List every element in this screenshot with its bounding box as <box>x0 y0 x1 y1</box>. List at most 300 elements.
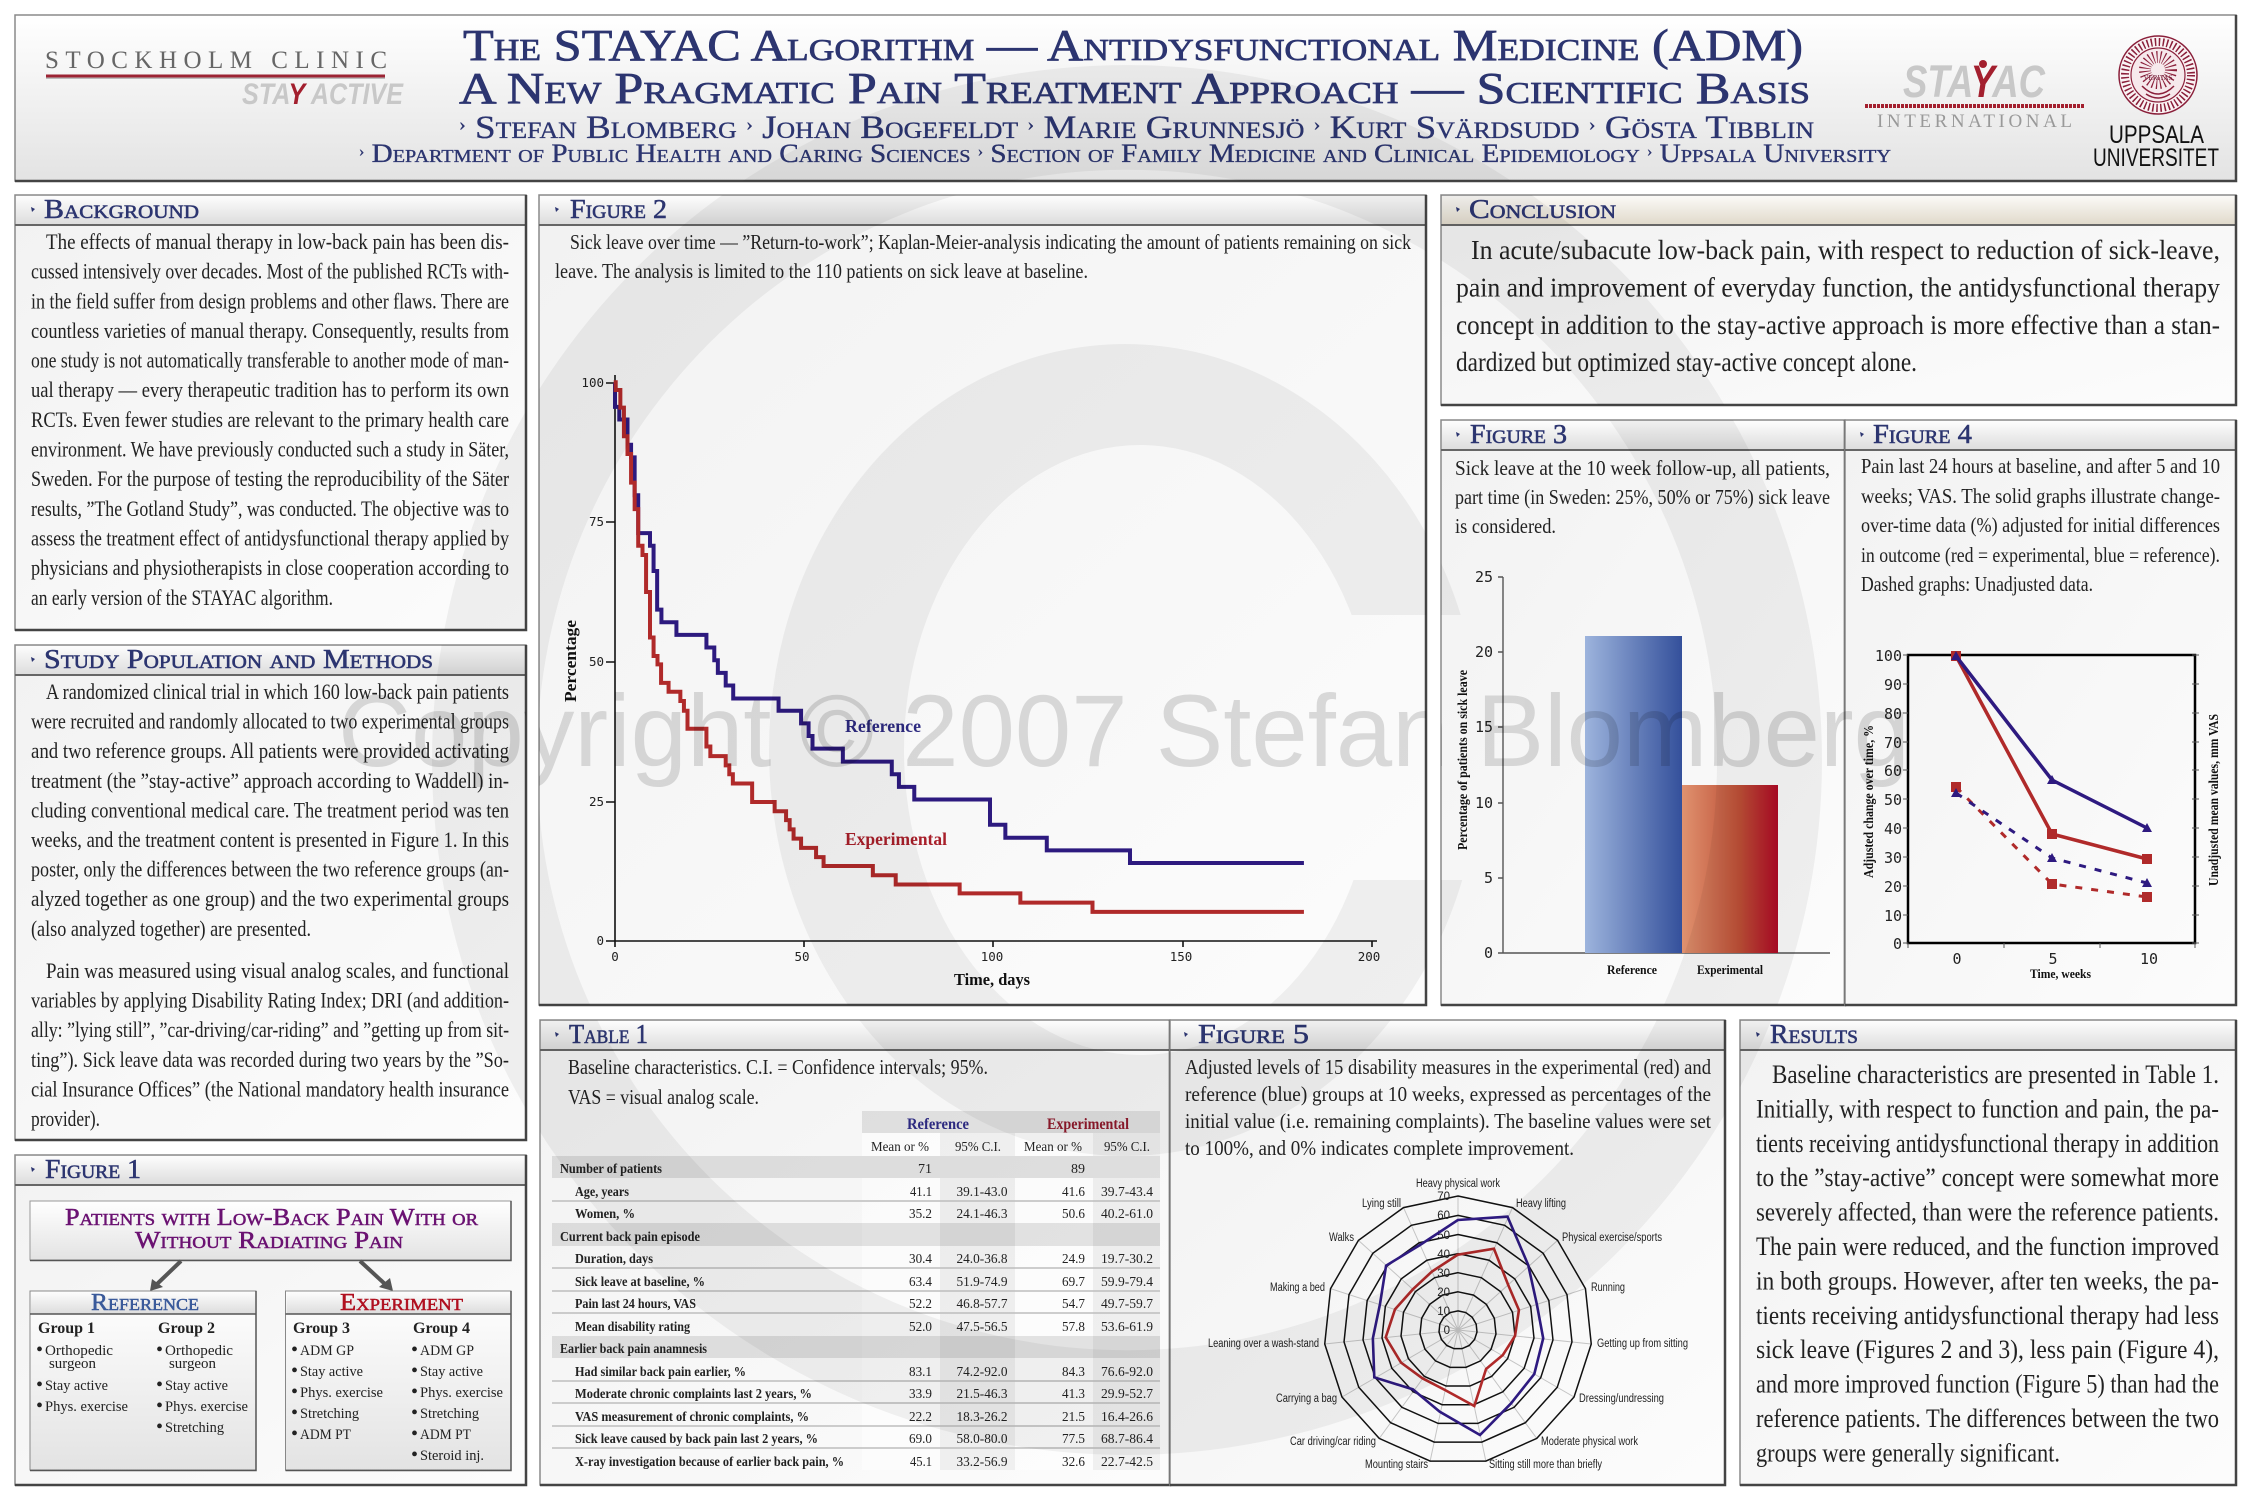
panel: figure 3 <box>1441 419 1845 1005</box>
axis labels: Physical exercise/sports <box>1562 1232 1662 1244</box>
row: x-ray investigation: 22.7-42.5 <box>1101 1455 1153 1470</box>
row: VAS measurement: 22.2 <box>909 1410 932 1425</box>
column headers <box>871 1116 1150 1155</box>
row: moderate chronic complaints: 29.9-52.7 <box>1101 1387 1153 1402</box>
group 3: • <box>291 1381 298 1403</box>
x tick labels <box>1952 950 2158 968</box>
group 4: ADM PT <box>420 1427 471 1443</box>
title line 2: A New Pragmatic Pain Treatment Approach — Scientific Basis <box>459 64 1810 113</box>
y tick labels: 20 <box>1884 878 1902 896</box>
curve: experimental <box>616 380 1304 912</box>
axes <box>606 375 1377 947</box>
affiliations: › Department of Public Health and Caring Sciences › Section of Family Medicine and Clinical Epidemiology › Uppsala University <box>359 139 1891 168</box>
text block: background: assess the treatment effect of antidysfunctional therapy applied by <box>31 526 509 550</box>
row: age <box>575 1185 1153 1200</box>
watermark: copyright symbol and text: Copyright © 2007 Stefan Blomberg <box>338 674 1910 788</box>
row: sick leave caused by back pain: 77.5 <box>1062 1432 1085 1447</box>
flow box: reference <box>30 1290 256 1470</box>
text block: study paragraph 1: cluding conventional medical care. The treatment period was ten <box>31 797 509 822</box>
row: sick leave at baseline: 63.4 <box>909 1275 932 1290</box>
logo: Uppsala University seal <box>2093 36 2219 172</box>
row: number of patients <box>560 1162 1085 1177</box>
group 1 <box>36 1320 128 1417</box>
row: earlier back pain anamnesis: Earlier back pain anamnesis <box>560 1342 707 1357</box>
column headers: Reference <box>907 1116 969 1133</box>
caption: figure 3 <box>1455 456 1830 538</box>
group 4: Phys. exercise <box>420 1385 503 1401</box>
logo: Uppsala University seal: UPPSALA <box>2109 121 2204 149</box>
row: women: Women, % <box>575 1207 635 1222</box>
row: age: Age, years <box>575 1185 629 1200</box>
group 4: • <box>411 1360 418 1382</box>
heading: figure 1: Figure 1 <box>45 1154 141 1184</box>
caption: table 1: Baseline characteristics. C.I. = Confidence intervals; 95%. <box>568 1055 988 1079</box>
group 1: Phys. exercise <box>45 1399 128 1415</box>
y tick labels: 90 <box>1884 676 1902 694</box>
caption: table 1 <box>568 1055 988 1109</box>
group 3: • <box>291 1360 298 1382</box>
ring value labels: 40 <box>1437 1249 1450 1261</box>
axis tick labels: 25 <box>589 794 604 809</box>
group 2: • <box>156 1374 163 1396</box>
axis tick labels: 0 <box>596 933 604 948</box>
group 3: ADM GP <box>300 1343 354 1359</box>
row: moderate chronic complaints: 33.9 <box>909 1387 932 1402</box>
row: x-ray investigation: 33.2-56.9 <box>956 1455 1008 1470</box>
text block: background: countless varieties of manual therapy. Consequently, results from <box>31 318 509 343</box>
axis labels: Sitting still more than briefly <box>1489 1459 1602 1471</box>
group 4: ADM GP <box>420 1343 474 1359</box>
row: sick leave at baseline: 69.7 <box>1062 1275 1085 1290</box>
y tick labels: 10 <box>1475 794 1493 812</box>
text block: study paragraph 2: cial Insurance Offices” (the National mandatory health insurance <box>31 1076 509 1101</box>
row: VAS measurement: 18.3-26.2 <box>956 1410 1008 1425</box>
row: pain last 24 hours: 54.7 <box>1062 1297 1085 1312</box>
panel: figure 2 <box>539 194 1426 1005</box>
row: women: 35.2 <box>909 1207 932 1222</box>
text block: study paragraph 2: provider). <box>31 1106 100 1131</box>
text block: background: Sweden. For the purpose of testing the reproducibility of the Säter <box>31 466 510 491</box>
flow box: patients: Patients with Low-Back Pain With or <box>65 1205 479 1231</box>
panel: conclusion <box>1441 194 2236 405</box>
series: reference <box>1373 1217 1543 1435</box>
caption: figure 5: initial value (i.e. remaining complaints). The baseline values were set <box>1185 1109 1711 1133</box>
caption: figure 5: to 100%, and 0% indicates complete improvement. <box>1185 1136 1574 1160</box>
row: moderate chronic complaints <box>575 1387 1153 1402</box>
caption: figure 3: part time (in Sweden: 25%, 50% or 75%) sick leave <box>1455 485 1830 509</box>
logo: STAYAC International: INTERNATIONAL <box>1877 111 2072 132</box>
group 2: Phys. exercise <box>165 1399 248 1415</box>
column headers: 95% C.I. <box>955 1140 1001 1155</box>
group 3 <box>291 1320 383 1445</box>
axis labels: Making a bed <box>1270 1282 1325 1294</box>
table shading <box>552 1111 1160 1470</box>
y tick labels: 30 <box>1884 849 1902 867</box>
caption: figure 2: Sick leave over time — ”Return-to-work”; Kaplan-Meier-analysis indicating the amount of patients remaining on sick <box>570 230 1411 254</box>
ring value labels: 30 <box>1437 1268 1450 1280</box>
series: reference solid <box>1951 651 2152 832</box>
text block: results: groups were generally significant. <box>1756 1438 2060 1467</box>
flow box: experiment: Experiment <box>340 1290 464 1316</box>
row: x-ray investigation: 32.6 <box>1062 1455 1085 1470</box>
row: age: 41.6 <box>1062 1185 1085 1200</box>
flow box: patients <box>30 1201 511 1260</box>
axis tick labels: 100 <box>581 375 604 390</box>
plot frame <box>1903 655 2199 948</box>
axis tick labels: 200 <box>1358 949 1380 964</box>
ring value labels: 10 <box>1437 1306 1450 1318</box>
logo: Stockholm Clinic Stay Active <box>45 47 404 111</box>
caption: figure 5: reference (blue) groups at 10 weeks, expressed as percentages of the <box>1185 1082 1711 1106</box>
row: women: 40.2-61.0 <box>1101 1207 1153 1222</box>
row: x-ray investigation <box>575 1455 1153 1470</box>
x tick labels: 10 <box>2140 950 2158 968</box>
row: VAS measurement: VAS measurement of chronic complaints, % <box>575 1410 809 1425</box>
axis tick labels: 0 <box>611 949 619 964</box>
y tick labels: 0 <box>1893 935 1902 953</box>
column headers: Mean or % <box>871 1140 929 1155</box>
arrow: to reference <box>150 1261 181 1291</box>
axis labels: Lying still <box>1362 1198 1401 1210</box>
row: age: 41.1 <box>910 1185 932 1200</box>
caption: figure 3: is considered. <box>1455 514 1556 538</box>
group 2: • <box>156 1395 163 1417</box>
line chart: pain over time <box>1862 647 2222 981</box>
row: sick leave caused by back pain: 69.0 <box>909 1432 932 1447</box>
row: pain last 24 hours: 46.8-57.7 <box>956 1297 1008 1312</box>
axis tick labels <box>581 375 1380 964</box>
row: duration <box>575 1252 1153 1267</box>
text block: conclusion: pain and improvement of everyday function, the antidysfunctional therapy <box>1456 272 2220 302</box>
ring value labels: 60 <box>1437 1210 1450 1222</box>
group 4: Stay active <box>420 1364 483 1380</box>
watermark: copyright symbol and text <box>338 65 1910 1455</box>
row: women: 24.1-46.3 <box>956 1207 1008 1222</box>
heading: figure 4: Figure 4 <box>1873 419 1973 449</box>
text block: background: cussed intensively over decades. Most of the published RCTs with- <box>31 259 509 284</box>
series: reference dashed <box>1951 788 2152 887</box>
row: had similar back pain: 74.2-92.0 <box>956 1365 1008 1380</box>
group 3: • <box>291 1339 298 1361</box>
curve: reference <box>615 383 1304 863</box>
row: VAS measurement <box>575 1410 1153 1425</box>
logo: STAYAC International <box>1865 56 2084 132</box>
row: duration: 24.0-36.8 <box>956 1252 1008 1267</box>
y tick labels: 5 <box>1484 869 1493 887</box>
group 4: • <box>411 1381 418 1403</box>
group 2: surgeon <box>169 1356 216 1372</box>
group 4 <box>411 1320 503 1466</box>
group 3: Stay active <box>300 1364 363 1380</box>
row: age: 39.7-43.4 <box>1101 1185 1153 1200</box>
row: pain last 24 hours: Pain last 24 hours, VAS <box>575 1297 696 1312</box>
text block: study paragraph 2: variables by applying Disability Rating Index; DRI (and addition- <box>31 988 509 1013</box>
axis labels: Getting up from sitting <box>1597 1338 1688 1350</box>
caption: figure 5: Adjusted levels of 15 disability measures in the experimental (red) and <box>1185 1055 1711 1079</box>
title line 1: The STAYAC Algorithm — Antidysfunctional Medicine (ADM) <box>463 21 1803 70</box>
axis labels: Leaning over a wash-stand <box>1208 1338 1319 1350</box>
row: women <box>575 1207 1153 1222</box>
ring value labels <box>1437 1191 1450 1337</box>
row: mean disability rating: Mean disability rating <box>575 1320 690 1335</box>
group 3: • <box>291 1402 298 1424</box>
row: mean disability rating: 47.5-56.5 <box>956 1320 1008 1335</box>
group 2: Stay active <box>165 1378 228 1394</box>
group 2 <box>156 1320 248 1438</box>
text block: background: results, ”The Gotland Study”, was conducted. The objective was to <box>31 496 509 521</box>
row: mean disability rating <box>575 1320 1153 1335</box>
logo: Stockholm Clinic Stay Active: STAY ACTIVE <box>242 78 404 111</box>
arrow: to experiment <box>360 1261 393 1291</box>
text block: results <box>1756 1060 2219 1467</box>
flow box: experiment <box>286 1290 511 1470</box>
axis tick labels: 50 <box>794 949 810 964</box>
y tick labels: 80 <box>1884 705 1902 723</box>
axis labels: Mounting stairs <box>1365 1459 1428 1471</box>
panel: figure 5 <box>1170 1019 1725 1485</box>
text block: background: physicians and physiotherapists in close cooperation according to <box>31 555 509 580</box>
chart: Kaplan-Meier curves <box>561 375 1380 989</box>
row: sick leave caused by back pain: 58.0-80.0 <box>956 1432 1008 1447</box>
flow box: reference: Reference <box>91 1290 199 1316</box>
panel: results <box>1740 1019 2236 1485</box>
group 4: Stretching <box>420 1406 479 1422</box>
panel: figure 4 <box>1845 419 2236 1005</box>
group 3: Phys. exercise <box>300 1385 383 1401</box>
row: women: 50.6 <box>1062 1207 1085 1222</box>
heading: study population: Study Population and Methods <box>44 644 433 674</box>
row: had similar back pain: 83.1 <box>909 1365 932 1380</box>
y tick labels: 60 <box>1884 762 1902 780</box>
heading: background: Background <box>44 194 199 224</box>
group 2: • <box>156 1416 163 1438</box>
axis labels: Dressing/undressing <box>1579 1393 1664 1405</box>
series: experimental solid <box>1951 651 2152 864</box>
bar label: reference: Reference <box>1607 962 1657 977</box>
group 2: • <box>156 1339 163 1361</box>
y tick labels: 10 <box>1884 907 1902 925</box>
logo: STAYAC International: STAYAC <box>1903 56 2046 107</box>
caption: figure 4 <box>1861 454 2220 596</box>
panel: background <box>15 194 526 630</box>
x axis title: Time, weeks <box>2030 966 2091 981</box>
caption: figure 4: Dashed graphs: Unadjusted data. <box>1861 572 2093 596</box>
row: duration: 19.7-30.2 <box>1101 1252 1153 1267</box>
table: baseline characteristics <box>552 1111 1160 1470</box>
ring value labels: 0 <box>1444 1325 1450 1337</box>
y tick labels: 40 <box>1884 820 1902 838</box>
rings <box>1325 1196 1591 1461</box>
text block: study paragraph 1: poster, only the differences between the two reference groups (an- <box>31 857 509 882</box>
axis tick labels: 100 <box>981 949 1003 964</box>
row: had similar back pain: 84.3 <box>1062 1365 1085 1380</box>
group 1: • <box>36 1339 43 1361</box>
spokes <box>1325 1196 1591 1461</box>
axis labels: Carrying a bag <box>1276 1393 1337 1405</box>
row: number of patients: Number of patients <box>560 1162 662 1177</box>
row: VAS measurement: 16.4-26.6 <box>1101 1410 1153 1425</box>
group 1: • <box>36 1395 43 1417</box>
heading: figure 2: Figure 2 <box>570 194 667 224</box>
text block: study paragraph 1: weeks, and the treatment content is presented in Figure 1. In this <box>31 827 509 852</box>
group 4: Group 4 <box>413 1320 470 1337</box>
row: sick leave at baseline: 51.9-74.9 <box>956 1275 1008 1290</box>
text block: background <box>31 229 510 610</box>
text block: study paragraph 1: (also analyzed together) are presented. <box>31 916 311 941</box>
row: duration: 24.9 <box>1062 1252 1085 1267</box>
ring value labels: 70 <box>1437 1191 1450 1203</box>
group 3: • <box>291 1423 298 1445</box>
axis labels: Running <box>1591 1282 1625 1294</box>
text block: study paragraph 1: A randomized clinical trial in which 160 low-back pain patients <box>46 679 509 704</box>
bar chart: sick leave <box>1456 568 1830 977</box>
flow box: patients: Without Radiating Pain <box>135 1228 403 1254</box>
series: experimental dashed <box>1951 782 2152 902</box>
axis labels <box>1208 1178 1688 1471</box>
group 3: ADM PT <box>300 1427 351 1443</box>
axis labels: Heavy physical work <box>1416 1178 1500 1190</box>
group 1: Stay active <box>45 1378 108 1394</box>
row: sick leave at baseline: 59.9-79.4 <box>1101 1275 1153 1290</box>
group 2: Stretching <box>165 1420 224 1436</box>
radar chart: disability measures <box>1208 1178 1688 1471</box>
heading: figure 5: Figure 5 <box>1198 1019 1309 1049</box>
group 3: Stretching <box>300 1406 359 1422</box>
heading: conclusion: Conclusion <box>1469 194 1616 224</box>
row: mean disability rating: 57.8 <box>1062 1320 1085 1335</box>
axis labels: Heavy lifting <box>1516 1198 1566 1210</box>
y tick labels: 50 <box>1884 791 1902 809</box>
text block: background: environment. We have previously conducted such a study in Säter, <box>31 436 509 462</box>
bar label: experimental: Experimental <box>1697 962 1763 977</box>
y tick labels <box>1475 568 1493 962</box>
panel: figure 1 <box>15 1154 526 1485</box>
group 1: Orthopedic <box>45 1343 113 1359</box>
row: age: 39.1-43.0 <box>956 1185 1008 1200</box>
axis tick labels: 50 <box>589 654 604 669</box>
text block: study paragraph 2 <box>31 958 509 1131</box>
text block: study paragraph 2: Pain was measured using visual analog scales, and functional <box>46 958 509 983</box>
text block: background: The effects of manual therapy in low-back pain has been dis- <box>46 229 509 254</box>
axis title: percentage: Percentage <box>561 620 580 702</box>
group 4: • <box>411 1444 418 1466</box>
group 1: • <box>36 1374 43 1396</box>
row: had similar back pain: 76.6-92.0 <box>1101 1365 1153 1380</box>
row: x-ray investigation: 45.1 <box>910 1455 932 1470</box>
group 4: • <box>411 1423 418 1445</box>
text block: study paragraph 1: were recruited and randomly allocated to two experimental groups <box>31 709 509 734</box>
row: pain last 24 hours: 49.7-59.7 <box>1101 1297 1153 1312</box>
axis tick labels: 150 <box>1170 949 1192 964</box>
text block: conclusion <box>1456 235 2220 377</box>
text block: study paragraph 1 <box>31 679 509 941</box>
caption: figure 3: Sick leave at the 10 week follow-up, all patients, <box>1455 456 1830 480</box>
row: sick leave caused by back pain: Sick leave caused by back pain last 2 years, % <box>575 1432 818 1447</box>
y tick labels: 70 <box>1884 734 1902 752</box>
row: number of patients: 71 <box>918 1162 932 1177</box>
panel: table 1 <box>540 1019 1170 1485</box>
heading: figure 3: Figure 3 <box>1470 419 1567 449</box>
logo: Stockholm Clinic Stay Active: STOCKHOLM CLINIC <box>45 47 387 74</box>
row: x-ray investigation: X-ray investigation because of earlier back pain, % <box>575 1455 844 1470</box>
label: reference: Reference <box>845 716 921 736</box>
text block: background: RCTs. Even fewer studies are relevant to the primary health care <box>31 407 509 432</box>
heading: table 1: Table 1 <box>569 1019 648 1049</box>
column headers: Mean or % <box>1024 1140 1082 1155</box>
group 4: • <box>411 1339 418 1361</box>
caption: figure 2: leave. The analysis is limited to the 110 patients on sick leave at baseline. <box>555 259 1088 283</box>
header banner <box>15 15 2236 181</box>
row: mean disability rating: 52.0 <box>909 1320 932 1335</box>
caption: table 1: VAS = visual analog scale. <box>568 1085 759 1109</box>
bar: experimental <box>1682 785 1778 953</box>
text block: study paragraph 1: alyzed together as one group) and the two experimental groups <box>31 886 509 911</box>
group 4: Steroid inj. <box>420 1448 484 1464</box>
axis labels: Moderate physical work <box>1541 1436 1638 1448</box>
y tick labels: 0 <box>1484 944 1493 962</box>
text block: study paragraph 1: treatment (the ”stay-active” approach according to Waddell) in- <box>31 768 509 793</box>
text block: background: ual therapy — every therapeutic tradition has to perform its own <box>31 377 509 402</box>
group 3: Group 3 <box>293 1320 350 1337</box>
text block: background: an early version of the STAYAC algorithm. <box>31 585 333 610</box>
row: mean disability rating: 53.6-61.9 <box>1101 1320 1153 1335</box>
row: current back pain episode: Current back pain episode <box>560 1230 700 1245</box>
row: duration: 30.4 <box>909 1252 932 1267</box>
x tick labels: 0 <box>1952 950 1962 968</box>
y tick labels: 15 <box>1475 718 1493 736</box>
row: pain last 24 hours <box>575 1297 1153 1312</box>
group 4: • <box>411 1402 418 1424</box>
heading: results: Results <box>1770 1019 1858 1049</box>
row: moderate chronic complaints: 21.5-46.3 <box>956 1387 1008 1402</box>
y tick labels: 20 <box>1475 643 1493 661</box>
row: had similar back pain: Had similar back pain earlier, % <box>575 1365 746 1380</box>
axis title: time: Time, days <box>954 970 1030 989</box>
row: moderate chronic complaints: 41.3 <box>1062 1387 1085 1402</box>
axis labels: Walks <box>1329 1232 1354 1244</box>
group 1: surgeon <box>49 1356 96 1372</box>
ring value labels: 20 <box>1437 1287 1450 1299</box>
row: moderate chronic complaints: Moderate chronic complaints last 2 years, % <box>575 1387 812 1402</box>
column headers: Experimental <box>1047 1116 1129 1133</box>
ring value labels: 50 <box>1437 1230 1450 1242</box>
text block: conclusion: dardized but optimized stay-active concept alone. <box>1456 347 1917 377</box>
axes <box>1498 577 1830 953</box>
text block: study paragraph 1: and two reference groups. All patients were provided activating <box>31 738 509 763</box>
row: pain last 24 hours: 52.2 <box>909 1297 932 1312</box>
group 1: Group 1 <box>38 1320 95 1337</box>
right axis title: Unadjusted mean values, mm VAS <box>2207 714 2222 886</box>
column headers: 95% C.I. <box>1104 1140 1150 1155</box>
authors: › Stefan Blomberg › Johan Bogefeldt › Marie Grunnesjö › Kurt Svärdsudd › Gösta Tibblin <box>459 110 1814 146</box>
bar: reference <box>1585 636 1682 953</box>
row: number of patients: 89 <box>1071 1162 1085 1177</box>
text block: background: in the field suffer from design problems and other flaws. There are <box>31 288 509 313</box>
axis tick labels: 75 <box>589 514 604 529</box>
group 2: Orthopedic <box>165 1343 233 1359</box>
y axis title: Percentage of patients on sick leave <box>1456 670 1471 850</box>
text block: results: sick leave (Figures 2 and 3), less pain (Figure 4), <box>1756 1335 2219 1364</box>
row: had similar back pain <box>575 1365 1153 1380</box>
caption: figure 5 <box>1185 1055 1711 1160</box>
text block: study paragraph 2: ally: ”lying still”, ”car-driving/car-riding” and ”getting up from sit- <box>31 1017 509 1042</box>
label: experimental: Experimental <box>845 829 947 849</box>
logo: Uppsala University seal: VERITAS <box>2144 74 2173 82</box>
row: sick leave caused by back pain <box>575 1432 1153 1447</box>
axis labels: Car driving/car riding <box>1290 1436 1376 1448</box>
left axis title: Adjusted change over time, % <box>1862 725 1877 878</box>
y tick labels: 100 <box>1875 647 1902 665</box>
